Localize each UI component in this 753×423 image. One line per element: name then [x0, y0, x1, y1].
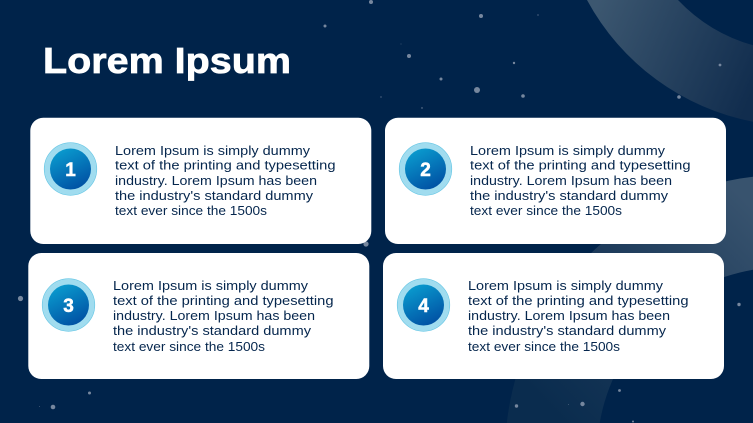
icon: number 2 badge: 2	[420, 160, 431, 181]
text block: card 1	[115, 143, 336, 218]
text block: card 1: the industry's standard dummy	[115, 188, 314, 203]
text block: card 3: text ever since the 1500s	[113, 339, 265, 354]
icon: number 4 badge	[397, 279, 450, 331]
icon: number 3 badge	[42, 279, 95, 331]
text block: card 2: Lorem Ipsum is simply dummy	[470, 143, 666, 158]
icon: number 3 badge: 3	[63, 296, 74, 317]
panel: card 3	[28, 253, 369, 379]
text block: card 2: industry. Lorem Ipsum has been	[470, 173, 672, 188]
panel: card 1	[30, 118, 371, 244]
text block: card 2: text of the printing and typesetting	[470, 158, 690, 172]
icon: number 4 badge: 4	[418, 296, 429, 317]
title: Lorem Ipsum	[43, 40, 291, 81]
decorative arc: top right	[587, 0, 753, 122]
text block: card 4: text of the printing and typesetting	[468, 293, 688, 308]
text block: card 4: the industry's standard dummy	[468, 323, 667, 338]
panel: card 4	[383, 253, 724, 379]
icon: number 1 badge	[44, 143, 97, 195]
text block: card 4: industry. Lorem Ipsum has been	[468, 308, 670, 323]
decorative arc: bottom right	[507, 177, 753, 423]
icon: number 1 badge: 1	[65, 160, 76, 181]
text block: card 4: Lorem Ipsum is simply dummy	[468, 278, 664, 293]
text block: card 4	[468, 278, 688, 354]
text block: card 3: the industry's standard dummy	[113, 323, 312, 338]
text block: card 1: text of the printing and typesetting	[115, 158, 336, 172]
panel: card 2	[385, 118, 726, 244]
text block: card 3: industry. Lorem Ipsum has been	[113, 308, 315, 323]
text block: card 4: text ever since the 1500s	[468, 339, 620, 354]
text block: card 3: text of the printing and typesetting	[113, 293, 334, 308]
text block: card 2: text ever since the 1500s	[470, 203, 622, 218]
text block: card 2: the industry's standard dummy	[470, 188, 669, 203]
text block: card 3: Lorem Ipsum is simply dummy	[113, 278, 309, 293]
icon: number 2 badge	[399, 143, 452, 195]
text block: card 1: text ever since the 1500s	[115, 203, 267, 218]
text block: card 2	[470, 143, 690, 218]
text block: card 3	[113, 278, 334, 354]
text block: card 1: industry. Lorem Ipsum has been	[115, 173, 317, 188]
text block: card 1: Lorem Ipsum is simply dummy	[115, 143, 311, 158]
